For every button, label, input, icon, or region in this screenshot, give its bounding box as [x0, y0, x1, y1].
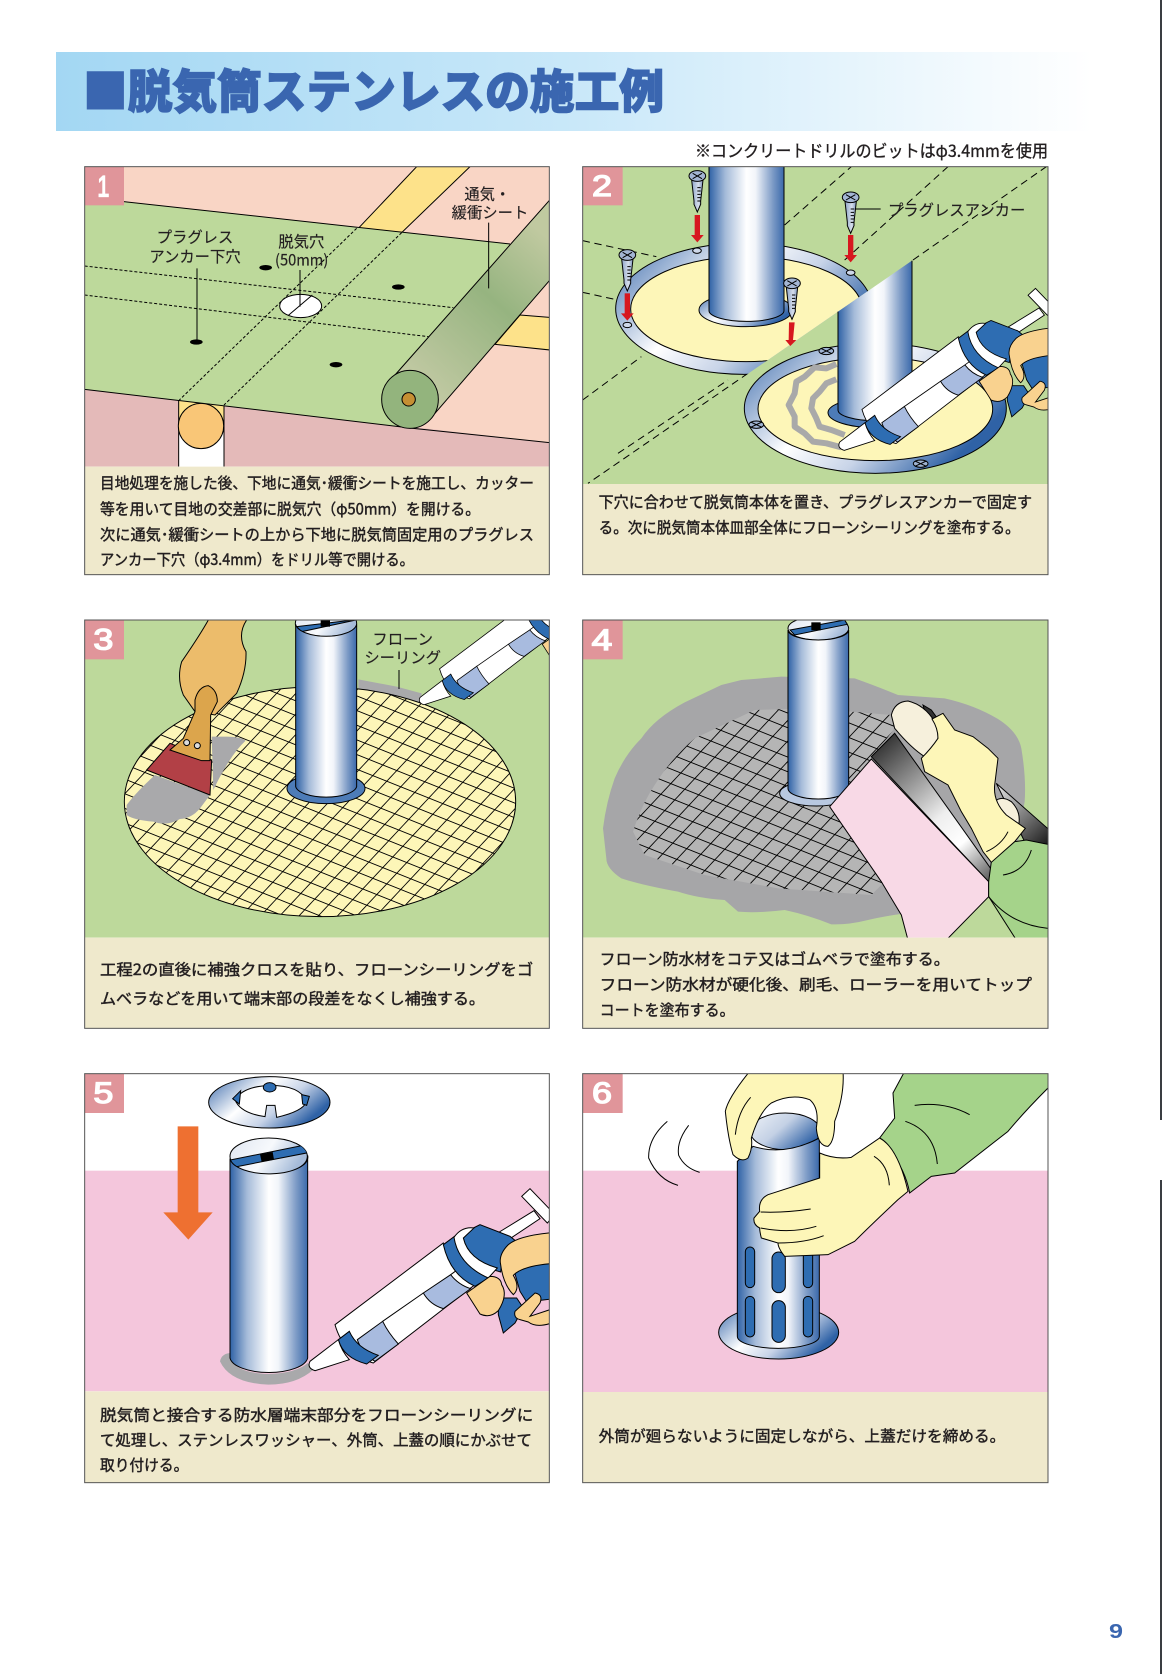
- step number badge: [85, 167, 124, 205]
- right page edge rule: [1160, 0, 1162, 1674]
- illustration: washer, tube and sealant gun: [85, 1074, 560, 1391]
- caption text: [100, 1403, 533, 1475]
- caption text: フローン防水材をコテ又はゴムベラで塗布する。: [600, 947, 950, 969]
- label: urethane sealing: シーリング: [364, 646, 441, 668]
- sleeve: [880, 1071, 1051, 1193]
- caption text: フローン防水材が硬化後、刷毛、ローラーを用いてトップ: [600, 973, 1033, 995]
- label: vent hole: [275, 230, 328, 270]
- title band: [56, 52, 1092, 131]
- label: vent hole: (50mm): [275, 248, 328, 270]
- label: ventilation sheet: [452, 183, 528, 223]
- step number badge: 1: [97, 171, 109, 204]
- caption text: ムベラなどを用いて端末部の段差をなくし補強する。: [100, 987, 485, 1009]
- step number badge: 6: [592, 1077, 612, 1110]
- step number badge: [583, 167, 623, 205]
- caption background: [85, 467, 549, 575]
- caption text: 外筒が廻らないように固定しながら、上蓋だけを締める。: [599, 1424, 1005, 1446]
- caption background: [85, 1391, 549, 1483]
- caption text: る。次に脱気筒本体皿部全体にフローンシーリングを塗布する。: [599, 516, 1020, 538]
- caption text: [100, 471, 534, 570]
- label: ventilation sheet: 通気・: [464, 183, 510, 205]
- caption background: [583, 1392, 1048, 1483]
- caption text: [600, 947, 1033, 1021]
- label: vent hole: 脱気穴: [278, 230, 324, 252]
- illustration: tightening the top cover by hand: [583, 1071, 1051, 1392]
- page number: 9: [1109, 1621, 1123, 1643]
- step number badge: 5: [93, 1077, 113, 1110]
- caption text: [599, 491, 1032, 538]
- caption background: [85, 938, 549, 1028]
- label: anchor pilot hole: プラグレス: [157, 226, 233, 248]
- caption text: 等を用いて目地の交差部に脱気穴（φ50mm）を開ける。: [100, 497, 480, 519]
- caption text: 次に通気･緩衝シートの上から下地に脱気筒固定用のプラグレス: [100, 523, 534, 545]
- caption text: 脱気筒と接合する防水層端末部分をフローンシーリングに: [100, 1403, 533, 1425]
- step number badge: [583, 1074, 623, 1113]
- note: drill bit size: ※コンクリートドリルのビットはφ3.4mmを使用: [695, 137, 1048, 162]
- illustration: fixing base and applying sealant: [583, 165, 1062, 484]
- caption background: [583, 938, 1048, 1028]
- anchors and arrows: [619, 171, 881, 346]
- caption text: 下穴に合わせて脱気筒本体を置き、プラグレスアンカーで固定す: [599, 491, 1032, 513]
- label: urethane sealing: [364, 627, 441, 668]
- panel: step 5: [85, 1074, 560, 1483]
- step number badge: 3: [93, 623, 113, 656]
- illustration: reinforcing cloth and spatula: [85, 620, 549, 938]
- step number badge: [85, 1074, 124, 1113]
- caption text: [100, 958, 533, 1009]
- step number badge: 2: [592, 170, 612, 203]
- label: ventilation sheet: 緩衝シート: [452, 201, 528, 223]
- label: anchor pilot hole: [149, 226, 241, 267]
- label: urethane sealing: フローン: [372, 627, 433, 649]
- caption text: 目地処理を施した後、下地に通気･緩衝シートを施工し、カッター: [100, 471, 534, 493]
- caption text: 工程2の直後に補強クロスを貼り、フローンシーリングをゴ: [100, 958, 533, 980]
- lower hand: [754, 1138, 908, 1256]
- panel: step 4: [583, 617, 1051, 1028]
- panel: step 1: [85, 167, 560, 575]
- step number badge: 4: [592, 624, 612, 657]
- upper hand: [725, 1071, 843, 1160]
- stainless tube: [227, 1138, 312, 1373]
- label: plugless anchor: プラグレスアンカー: [888, 198, 1025, 220]
- label: anchor pilot hole: アンカー下穴: [149, 245, 241, 267]
- illustration: ventilation sheet laid on substrate: [85, 167, 560, 468]
- title band: ■脱気筒ステンレスの施工例: [83, 56, 664, 122]
- illustration: waterproofing with trowel: [583, 617, 1051, 940]
- step number badge: [85, 620, 124, 659]
- washer: [209, 1077, 330, 1128]
- caption background: [583, 484, 1048, 575]
- caption text: コートを塗布する。: [600, 999, 735, 1021]
- caption text: アンカー下穴（φ3.4mm）をドリル等で開ける。: [100, 548, 414, 570]
- panel: step 3: [84, 620, 550, 1029]
- panel: step 2: [583, 165, 1062, 575]
- caption text: て処理し、ステンレスワッシャー、外筒、上蓋の順にかぶせて: [100, 1428, 532, 1450]
- step number badge: [583, 620, 623, 659]
- arrow: down: [163, 1126, 213, 1240]
- caption text: 取り付ける。: [100, 1453, 188, 1475]
- panel: step 6: [583, 1071, 1051, 1483]
